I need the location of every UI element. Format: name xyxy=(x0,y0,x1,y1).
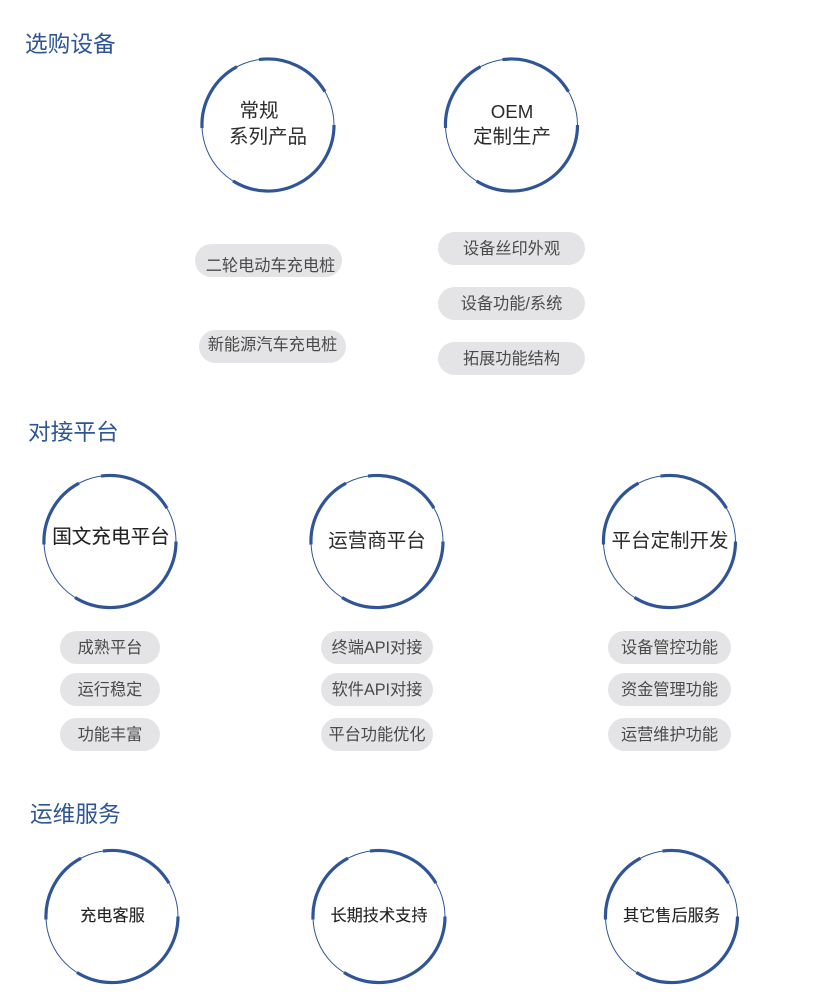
pill: 成熟平台 xyxy=(60,631,160,664)
pill: 运行稳定 xyxy=(60,673,160,706)
heading: 运维服务: 运维服务 xyxy=(30,801,121,827)
pill: 软件API对接: 软件API对接 xyxy=(332,681,422,699)
pill: 平台功能优化: 平台功能优化 xyxy=(328,726,426,744)
pill: 资金管理功能: 资金管理功能 xyxy=(621,681,718,699)
circle label: 其它售后服务: 其它售后服务 xyxy=(623,907,720,925)
pill: 二轮电动车充电桩: 二轮电动车充电桩 xyxy=(206,257,335,275)
pill: 设备丝印外观: 设备丝印外观 xyxy=(463,240,560,258)
pill: 终端API对接: 终端API对接 xyxy=(332,639,422,657)
ring: 运营商平台 xyxy=(311,475,443,608)
circle label: 国文充电平台: 国文充电平台 xyxy=(52,526,170,548)
ring: 平台定制开发 xyxy=(603,475,736,608)
pill: 终端API对接 xyxy=(321,631,433,664)
ring: OEM定制生产 xyxy=(445,59,578,191)
pill: 拓展功能结构 xyxy=(438,342,585,375)
pill: 设备功能/系统: 设备功能/系统 xyxy=(461,295,562,313)
circle label: 运营商平台: 运营商平台 xyxy=(328,530,426,552)
pill: 新能源汽车充电桩: 新能源汽车充电桩 xyxy=(208,336,337,354)
heading: 对接平台: 对接平台 xyxy=(28,419,119,445)
pill: 软件API对接 xyxy=(321,673,433,706)
pill: 成熟平台: 成熟平台 xyxy=(78,639,142,657)
pill: 设备功能/系统 xyxy=(438,287,585,320)
circle label: 长期技术支持: 长期技术支持 xyxy=(330,907,428,925)
pill: 平台功能优化 xyxy=(321,718,433,751)
pill: 设备丝印外观 xyxy=(438,232,585,265)
heading: 选购设备: 选购设备 xyxy=(25,31,116,57)
circle label: 系列产品: 系列产品 xyxy=(229,126,307,148)
circle label: 定制生产: 定制生产 xyxy=(473,126,551,148)
pill: 功能丰富: 功能丰富 xyxy=(78,726,142,744)
circle label: 常规: 常规 xyxy=(239,100,279,122)
pill: 设备管控功能 xyxy=(608,631,731,664)
circle label: 充电客服: 充电客服 xyxy=(80,907,145,925)
ring: 长期技术支持 xyxy=(313,850,445,983)
pill: 新能源汽车充电桩 xyxy=(199,330,346,363)
ring: 国文充电平台 xyxy=(44,475,176,608)
pill: 设备管控功能: 设备管控功能 xyxy=(621,639,718,657)
pill: 二轮电动车充电桩 xyxy=(195,244,342,277)
ring: 充电客服 xyxy=(46,850,178,983)
ring: 其它售后服务 xyxy=(605,850,738,983)
pill: 功能丰富 xyxy=(60,718,160,751)
pill: 运营维护功能: 运营维护功能 xyxy=(621,726,718,744)
ring: 常规系列产品 xyxy=(202,59,334,191)
circle label: 平台定制开发: 平台定制开发 xyxy=(611,530,729,552)
pill: 拓展功能结构: 拓展功能结构 xyxy=(463,350,560,368)
pill: 资金管理功能 xyxy=(608,673,731,706)
pill: 运行稳定: 运行稳定 xyxy=(78,681,142,699)
circle label: OEM: OEM xyxy=(491,101,533,122)
pill: 运营维护功能 xyxy=(608,718,731,751)
